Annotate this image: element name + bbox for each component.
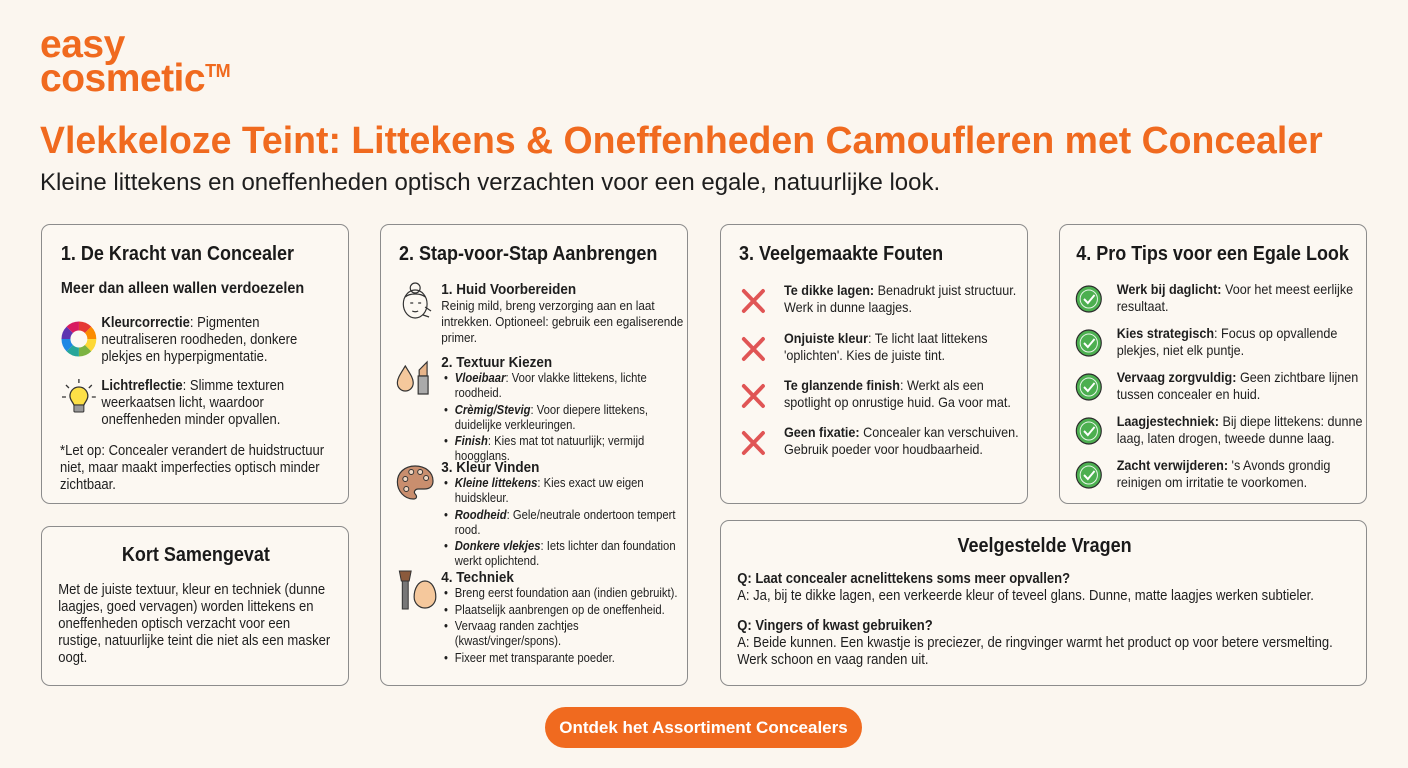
step 3: Donkere vlekjes: Iets lichter dan foundation werkt oplichtend. [455,539,676,568]
panel: veelgestelde vragen [720,520,1367,686]
panel: pro tips [1059,224,1367,504]
heading: 2. Stap-voor-Stap Aanbrengen [399,243,657,265]
title: Vlekkeloze Teint: Littekens & Oneffenheden Camoufleren met Concealer [40,120,1323,162]
step 2: Finish: Kies mat tot natuurlijk; vermijd hoogglans. [455,434,644,463]
step 2 [396,354,648,463]
panel: veelgemaakte fouten [720,224,1028,504]
step 4: 4. Techniek [441,569,514,586]
item: kleurcorrectie: Kleurcorrectie: Pigmenten neutraliseren roodheden, donkere plekjes en hyperpigmentatie. [101,315,297,365]
icon: brush and sponge [398,570,436,610]
button: call to action [545,707,862,748]
step 3 [396,459,676,568]
mistake 1: Te dikke lagen: Benadrukt juist structuur. Werk in dunne laagjes. [784,282,1016,315]
faq 1 [737,571,1314,604]
step 3: 3. Kleur Vinden [441,459,539,476]
faq 2: A: Beide kunnen. Een kwastje is preciezer, de ringvinger warmt het product op voor betere versmelting. Werk schoon en vaag randen uit. [737,635,1333,668]
step 3: Kleine littekens: Kies exact uw eigen huidskleur. [455,476,644,505]
panel: kort samengevat [41,526,349,686]
note: *Let op: Concealer verandert de huidstructuur niet, maar maakt imperfecties optisch minder zichtbaar. [60,443,324,493]
faq 1: A: Ja, bij te dikke lagen, een verkeerde kleur of teveel glans. Dunne, matte laagjes werken subtieler. [737,588,1314,604]
subtitle: Kleine littekens en oneffenheden optisch verzachten voor een egale, natuurlijke look. [40,169,940,196]
logo: cosmeticTM [40,57,230,100]
tip 4: Laagjestechniek: Bij diepe littekens: dunne laag, laten drogen, tweede dunne laag. [1117,413,1363,446]
mistake 2: Onjuiste kleur: Te licht laat littekens 'oplichten'. Kies de juiste tint. [784,330,988,363]
step 1: 1. Huid Voorbereiden [441,281,576,298]
step 1 [402,281,683,345]
tip 5: Zacht verwijderen: 's Avonds grondig reinigen om irritatie te voorkomen. [1117,457,1330,490]
icon: colour wheel [62,322,96,356]
heading: 4. Pro Tips voor een Egale Look [1076,243,1349,265]
heading: Kort Samengevat [122,544,270,566]
heading: 1. De Kracht van Concealer [61,243,294,265]
panel: stap-voor-stap [380,224,688,686]
step 2: 2. Textuur Kiezen [441,354,552,371]
icon: face [402,282,432,319]
button: call to action: Ontdek het Assortiment Concealers [559,718,848,737]
faq 2: Q: Vingers of kwast gebruiken? [737,618,933,634]
item: lichtreflectie: Lichtreflectie: Slimme texturen weerkaatsen licht, waardoor oneffenheden minder opvallen. [101,378,284,428]
icon: palette [396,465,434,500]
subheading: Meer dan alleen wallen verdoezelen [61,280,304,297]
step 2: Vloeibaar: Voor vlakke littekens, lichte roodheid. [455,371,647,400]
faq 1: Q: Laat concealer acnelittekens soms meer opvallen? [737,571,1070,587]
step 4: Plaatselijk aanbrengen op de oneffenheid. [455,602,665,616]
step 4 [398,569,677,664]
panel: de kracht van concealer [41,224,349,504]
icon: drop and lipstick tube [396,360,429,395]
faq 2 [737,618,1333,668]
step 4: Vervaag randen zachtjes (kwast/vinger/spons). [455,619,579,648]
heading: Veelgestelde Vragen [958,535,1132,557]
summary text: Met de juiste textuur, kleur en techniek (dunne laagjes, goed vervagen) worden littekens en oneffenheden optisch verzacht voor een rustige, natuurlijke teint die niet als een masker oogt. [58,582,330,666]
logo: easy [40,23,125,66]
logo [40,23,230,100]
mistake 4: Geen fixatie: Concealer kan verschuiven. Gebruik poeder voor houdbaarheid. [784,424,1019,457]
tip 1: Werk bij daglicht: Voor het meest eerlijke resultaat. [1117,281,1353,314]
step 4: Breng eerst foundation aan (indien gebruikt). [455,586,677,600]
heading: 3. Veelgemaakte Fouten [739,243,943,265]
step 4: Fixeer met transparante poeder. [455,650,615,664]
tip 2: Kies strategisch: Focus op opvallende plekjes, niet elk puntje. [1117,325,1337,358]
step 2: Crèmig/Stevig: Voor diepere littekens, duidelijke verkleuringen. [455,402,648,432]
step 3: Roodheid: Gele/neutrale ondertoon tempert rood. [455,508,676,536]
mistake 3: Te glanzende finish: Werkt als een spotlight op onrustige huid. Ga voor mat. [784,377,1011,410]
icon: light bulb [62,379,96,412]
step 1: Reinig mild, breng verzorging aan en laat intrekken. Optioneel: gebruik een egaliserende primer. [441,298,683,345]
tip 3: Vervaag zorgvuldig: Geen zichtbare lijnen tussen concealer en huid. [1117,369,1358,402]
